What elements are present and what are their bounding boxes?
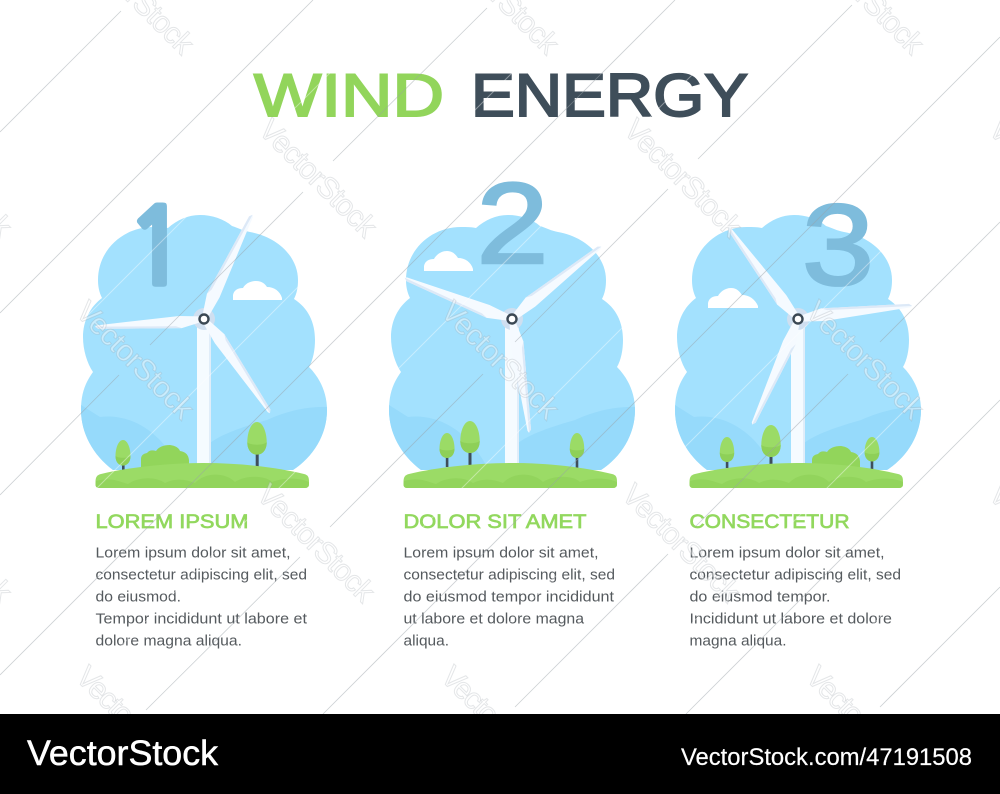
body text: aliqua. [404,634,449,650]
cloud backdrop [81,215,327,470]
body text: do eiusmod. [96,590,181,606]
body text: consectetur adipiscing elit, sed [404,568,615,584]
body text: Lorem ipsum dolor sit amet, [404,546,598,562]
body text: ut labore et dolore magna [404,612,585,628]
watermark overlay: VectorStock [617,113,749,244]
wind turbine [95,211,277,466]
tree small right [865,437,879,469]
watermark overlay: VectorStock [434,295,566,426]
body text: consectetur adipiscing elit, sed [96,568,307,584]
body text: Lorem ipsum dolor sit amet, [690,546,884,562]
title: WIND [254,62,444,129]
panel: step 2 [383,160,638,650]
small cloud [424,251,473,271]
watermark overlay: Vecto [69,660,141,731]
cloud backdrop [389,215,635,470]
wind turbine [722,224,913,466]
title [254,62,748,129]
body text: dolore magna aliqua. [96,634,242,650]
watermark overlay: VectorStock [69,295,201,426]
footer image id: VectorStock.com/47191508 [681,744,972,771]
watermark overlay: VectorStock [250,478,382,609]
heading: CONSECTETUR [690,511,850,533]
tree small left [440,433,454,467]
body text: magna aliqua. [690,634,786,650]
ground [404,463,617,488]
number 2: 2 [476,160,548,288]
watermark overlay: Vecto [434,660,506,731]
tree large [761,425,781,465]
wind turbine [402,240,605,466]
tree large [460,421,480,466]
panel: step 3 [669,182,924,650]
watermark overlay: VectorStock [252,113,384,244]
watermark overlay: Vecto [799,660,871,731]
number 3: 3 [802,182,874,310]
small cloud [233,281,282,300]
watermark overlay: VectorStock [799,295,931,426]
panel: step 1 [75,196,330,650]
body text [690,546,901,650]
bush [812,446,860,468]
body text: consectetur adipiscing elit, sed [690,568,901,584]
background hills [675,405,921,470]
footer bar [0,714,1000,794]
small cloud [708,288,758,308]
watermark overlay: VectorStock [615,478,747,609]
body text: Tempor incididunt ut labore et [96,612,307,628]
body text: Incididunt ut labore et dolore [690,612,892,628]
tree small left [720,437,734,468]
body text: do eiusmod tempor incididunt [404,590,614,606]
number 1: 1 [125,196,189,300]
footer brand: VectorStock [27,734,219,773]
body text [96,546,307,650]
body text: do eiusmod tempor. [690,590,830,606]
background hills [81,405,327,470]
tree large [247,422,267,467]
ground [96,463,309,488]
background hills [389,405,635,470]
body text [404,546,615,650]
title: ENERGY [471,62,748,129]
heading: DOLOR SIT AMET [404,511,587,533]
bush [141,445,189,467]
body text: Lorem ipsum dolor sit amet, [96,546,290,562]
ground [690,463,903,488]
tree small right [570,433,584,469]
heading: LOREM IPSUM [96,511,248,533]
cloud backdrop [675,215,921,470]
tree small [116,440,130,470]
